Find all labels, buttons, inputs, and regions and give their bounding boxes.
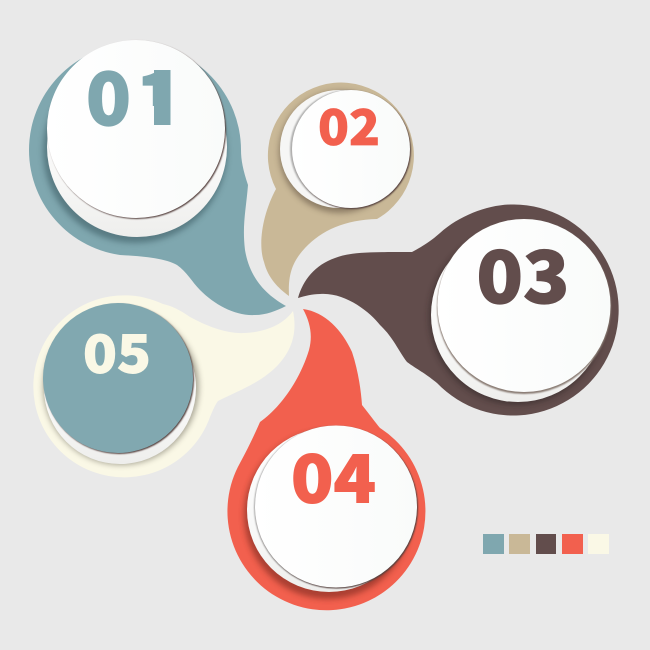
number 03: 03 xyxy=(476,219,570,324)
number 01 xyxy=(88,70,170,127)
legend: colour swatches xyxy=(483,534,609,554)
panel: step 03 xyxy=(298,204,619,415)
number 04: 04 xyxy=(291,426,376,522)
panel: step 02 xyxy=(261,83,414,296)
number 01: 1 xyxy=(136,41,181,147)
number 05: 05 xyxy=(83,313,151,389)
number 01: 0 xyxy=(86,41,131,147)
panel: step 05 xyxy=(33,295,295,477)
number 02: 02 xyxy=(318,89,380,160)
panel: step 04 xyxy=(227,309,425,610)
panel: step 01 xyxy=(29,40,286,315)
